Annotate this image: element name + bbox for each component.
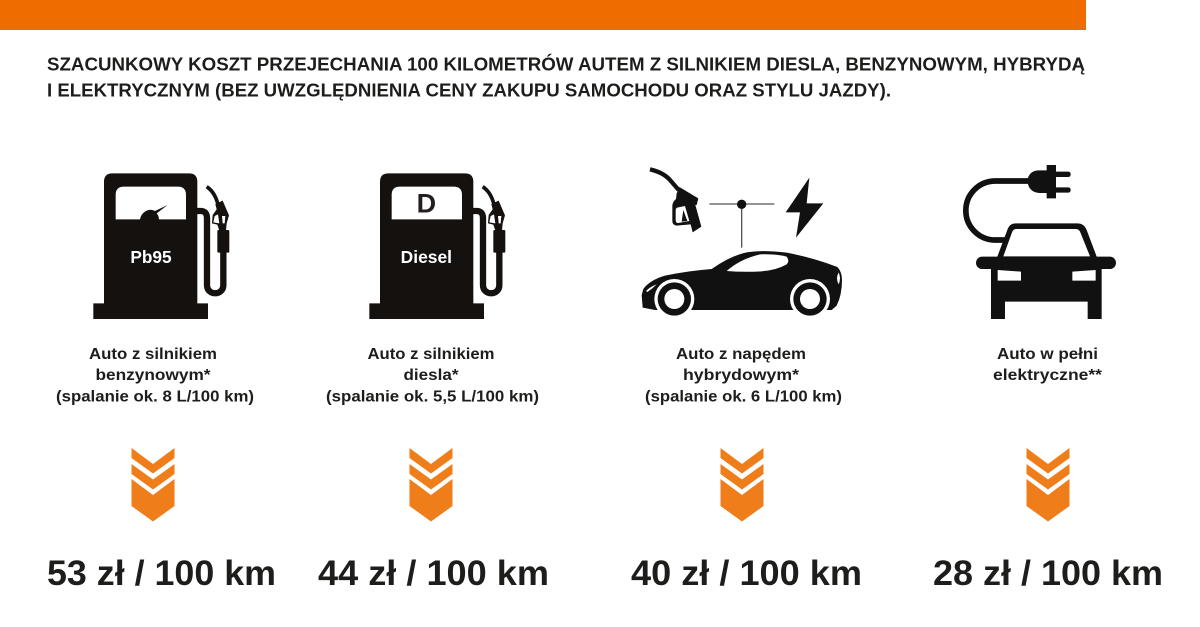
title: I ELEKTRYCZNYM (BEZ UWZGLĘDNIENIA CENY ZAKUPU SAMOCHODU ORAZ STYLU JAZDY).	[47, 80, 891, 100]
description: petrol: (spalanie ok. 8 L/100 km)	[56, 388, 254, 406]
description: hybrid: Auto z napędem	[676, 346, 806, 363]
cost: diesel: 44 zł / 100 km	[318, 554, 549, 593]
cost: petrol: 53 zł / 100 km	[47, 554, 276, 593]
icon: orange chevrons	[720, 448, 764, 522]
cost: electric: 28 zł / 100 km	[933, 554, 1163, 593]
description: electric	[993, 346, 1103, 384]
car window	[727, 254, 788, 272]
pump label: Pb95	[130, 247, 172, 267]
description: petrol: benzynowym*	[96, 367, 211, 384]
wheels	[654, 279, 694, 319]
icon: Pb95 petrol pump	[93, 173, 229, 319]
description: electric: elektryczne**	[993, 367, 1103, 384]
description: petrol: Auto z silnikiem	[89, 346, 217, 363]
cable and plug	[966, 165, 1071, 240]
car body	[642, 251, 842, 310]
description: hybrid	[645, 346, 842, 406]
fuel nozzle	[650, 169, 701, 232]
cost: hybrid: 40 zł / 100 km	[631, 554, 862, 593]
pump label: Diesel	[401, 247, 452, 267]
description: diesel: Auto z silnikiem	[368, 346, 494, 363]
top orange bar	[0, 0, 1086, 30]
description: petrol	[56, 346, 254, 406]
description: hybrid: (spalanie ok. 6 L/100 km)	[645, 388, 842, 406]
icon: hybrid car with fuel nozzle and bolt	[642, 169, 842, 319]
icon: electric car with plug	[966, 165, 1116, 319]
fuel letter: D	[417, 189, 436, 219]
description: diesel	[326, 346, 539, 406]
description: hybrid: hybrydowym*	[683, 367, 800, 384]
panel: petrol car	[47, 173, 276, 593]
description: diesel: diesla*	[404, 367, 459, 384]
icon: orange chevrons	[132, 448, 174, 522]
panel: diesel car	[318, 173, 549, 593]
panel: electric car	[933, 165, 1163, 593]
title: SZACUNKOWY KOSZT PRZEJECHANIA 100 KILOMETRÓW AUTEM Z SILNIKIEM DIESLA, BENZYNOWYM, HYBRYDĄ	[47, 54, 1085, 74]
panel: hybrid car	[631, 169, 862, 593]
connector line	[709, 204, 774, 248]
icon: orange chevrons	[1026, 448, 1070, 522]
car front	[997, 223, 1097, 258]
description: diesel: (spalanie ok. 5,5 L/100 km)	[326, 388, 539, 406]
description: electric: Auto w pełni	[997, 346, 1098, 363]
icon: orange chevrons	[410, 448, 452, 522]
icon: diesel pump	[369, 173, 505, 319]
lightning bolt	[786, 178, 823, 238]
title	[47, 54, 1085, 100]
